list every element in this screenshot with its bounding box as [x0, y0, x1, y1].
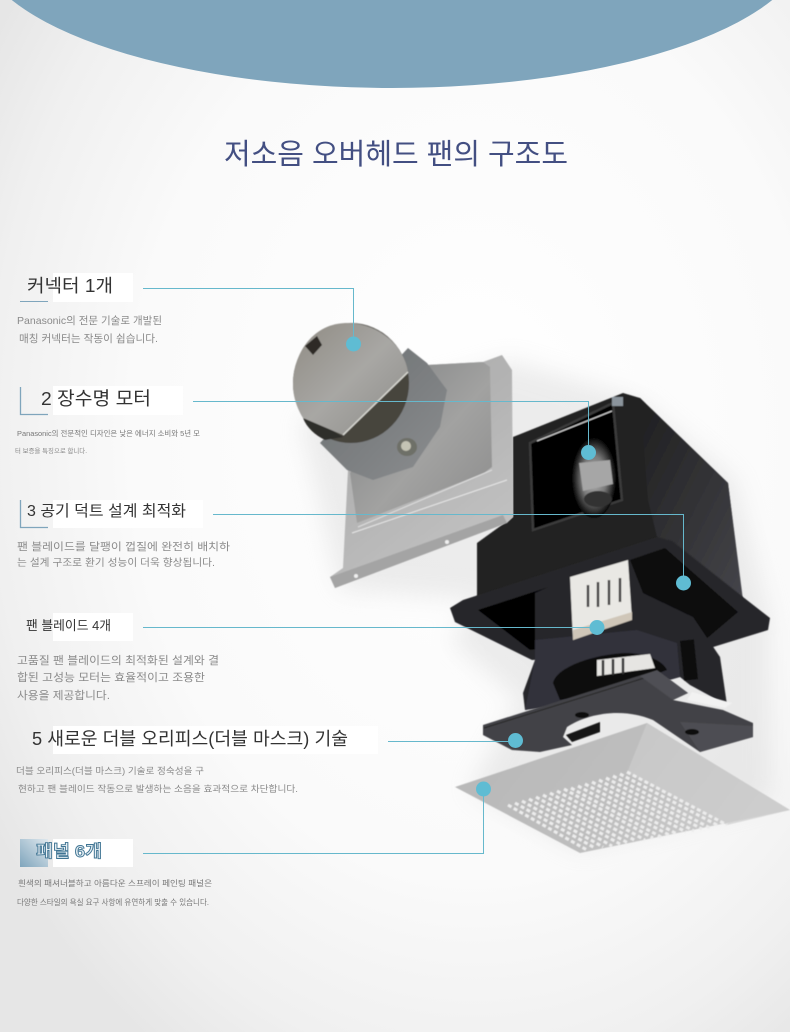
white label background 2 [53, 386, 183, 415]
description 3 [17, 540, 230, 569]
black motor housing [477, 393, 743, 604]
white grille panel [455, 723, 790, 853]
leader line 6 [143, 789, 484, 854]
title: 저소음 오버헤드 팬의 구조도 [224, 139, 568, 171]
top blue arc [0, 0, 790, 88]
grille perforations [508, 772, 727, 850]
blower opening [553, 653, 667, 700]
marker 1 [346, 336, 361, 352]
leader line 4 [143, 626, 597, 628]
marker 2 [581, 445, 596, 460]
flange [450, 537, 770, 660]
heading 1: 커넥터 1개 [27, 276, 113, 296]
white label background 6 [53, 839, 133, 867]
motor [572, 438, 616, 518]
description 6: 다양한 스타일의 욕실 요구 사항에 유연하게 맞출 수 있습니다. [17, 897, 209, 907]
mounting flange and blower housing [450, 537, 770, 710]
heading 5: 5 새로운 더블 오리피스(더블 마스크) 기술 [32, 729, 348, 749]
marker 3 [676, 576, 691, 590]
product shadow [300, 360, 770, 850]
motor window [530, 403, 622, 530]
blue swatch 6 [20, 839, 48, 867]
description 4: 고품질 팬 블레이드의 최적화된 설계와 결 [17, 654, 219, 667]
heading 6: 패널 6개 [36, 842, 102, 861]
leader line 5 [388, 740, 515, 742]
description 2 [15, 428, 200, 455]
description 6 [17, 878, 212, 907]
description 1 [17, 315, 162, 345]
round connector cap [293, 323, 409, 443]
duct collar [320, 348, 447, 480]
leader line 3 [213, 514, 684, 583]
description 2: Panasonic의 전문적인 디자인은 낮은 에너지 소비와 5년 모 [17, 428, 200, 438]
description 4 [17, 654, 219, 702]
heading 4: 팬 블레이드 4개 [26, 618, 111, 633]
callout 6: panel [17, 782, 491, 907]
leader line 2 [193, 402, 588, 452]
white fan blades [570, 560, 632, 640]
plate recess [350, 362, 492, 523]
heading 3: 3 공기 덕트 설계 최적화 [27, 502, 186, 520]
product illustration: exploded overhead fan [293, 323, 790, 853]
housing body [523, 560, 727, 710]
white label background 1 [53, 273, 133, 302]
description 6: 흰색의 패셔너블하고 아름다운 스프레이 페인팅 패널은 [18, 878, 212, 888]
callout 5: double orifice [16, 726, 523, 794]
description 1: 매칭 커넥터는 작동이 쉽습니다. [19, 333, 158, 345]
white label background 4 [53, 613, 133, 641]
white label background 5 [53, 726, 378, 754]
white label background 3 [53, 500, 203, 528]
callout 3: air duct design [17, 500, 691, 590]
heading 2: 2 장수명 모터 [41, 388, 151, 409]
description 2: 터 보증을 특징으로 합니다. [15, 446, 87, 455]
description 3: 는 설계 구조로 환기 성능이 더욱 향상됩니다. [17, 556, 215, 569]
marker 6 [476, 782, 491, 796]
description 5: 더블 오리피스(더블 마스크) 기술로 정숙성을 구 [16, 766, 204, 776]
leader line 1 [143, 288, 354, 344]
description 5 [16, 766, 298, 794]
callout 1: connector [17, 273, 361, 352]
description 5: 현하고 팬 블레이드 작동으로 발생하는 소음을 효과적으로 차단합니다. [18, 783, 298, 794]
description 1: Panasonic의 전문 기술로 개발된 [17, 315, 162, 327]
description 4: 합된 고성능 모터는 효율적이고 조용한 [17, 671, 205, 684]
callout 2: long-life motor [15, 386, 596, 460]
marker 4 [590, 620, 604, 635]
marker 5 [508, 733, 523, 748]
dark orifice plate [483, 670, 753, 752]
description 4: 사용을 제공합니다. [17, 689, 110, 702]
description 3: 팬 블레이드를 달팽이 껍질에 완전히 배치하 [17, 540, 230, 553]
callout 4: fan blades [17, 613, 604, 702]
galvanised duct adapter [293, 323, 513, 588]
